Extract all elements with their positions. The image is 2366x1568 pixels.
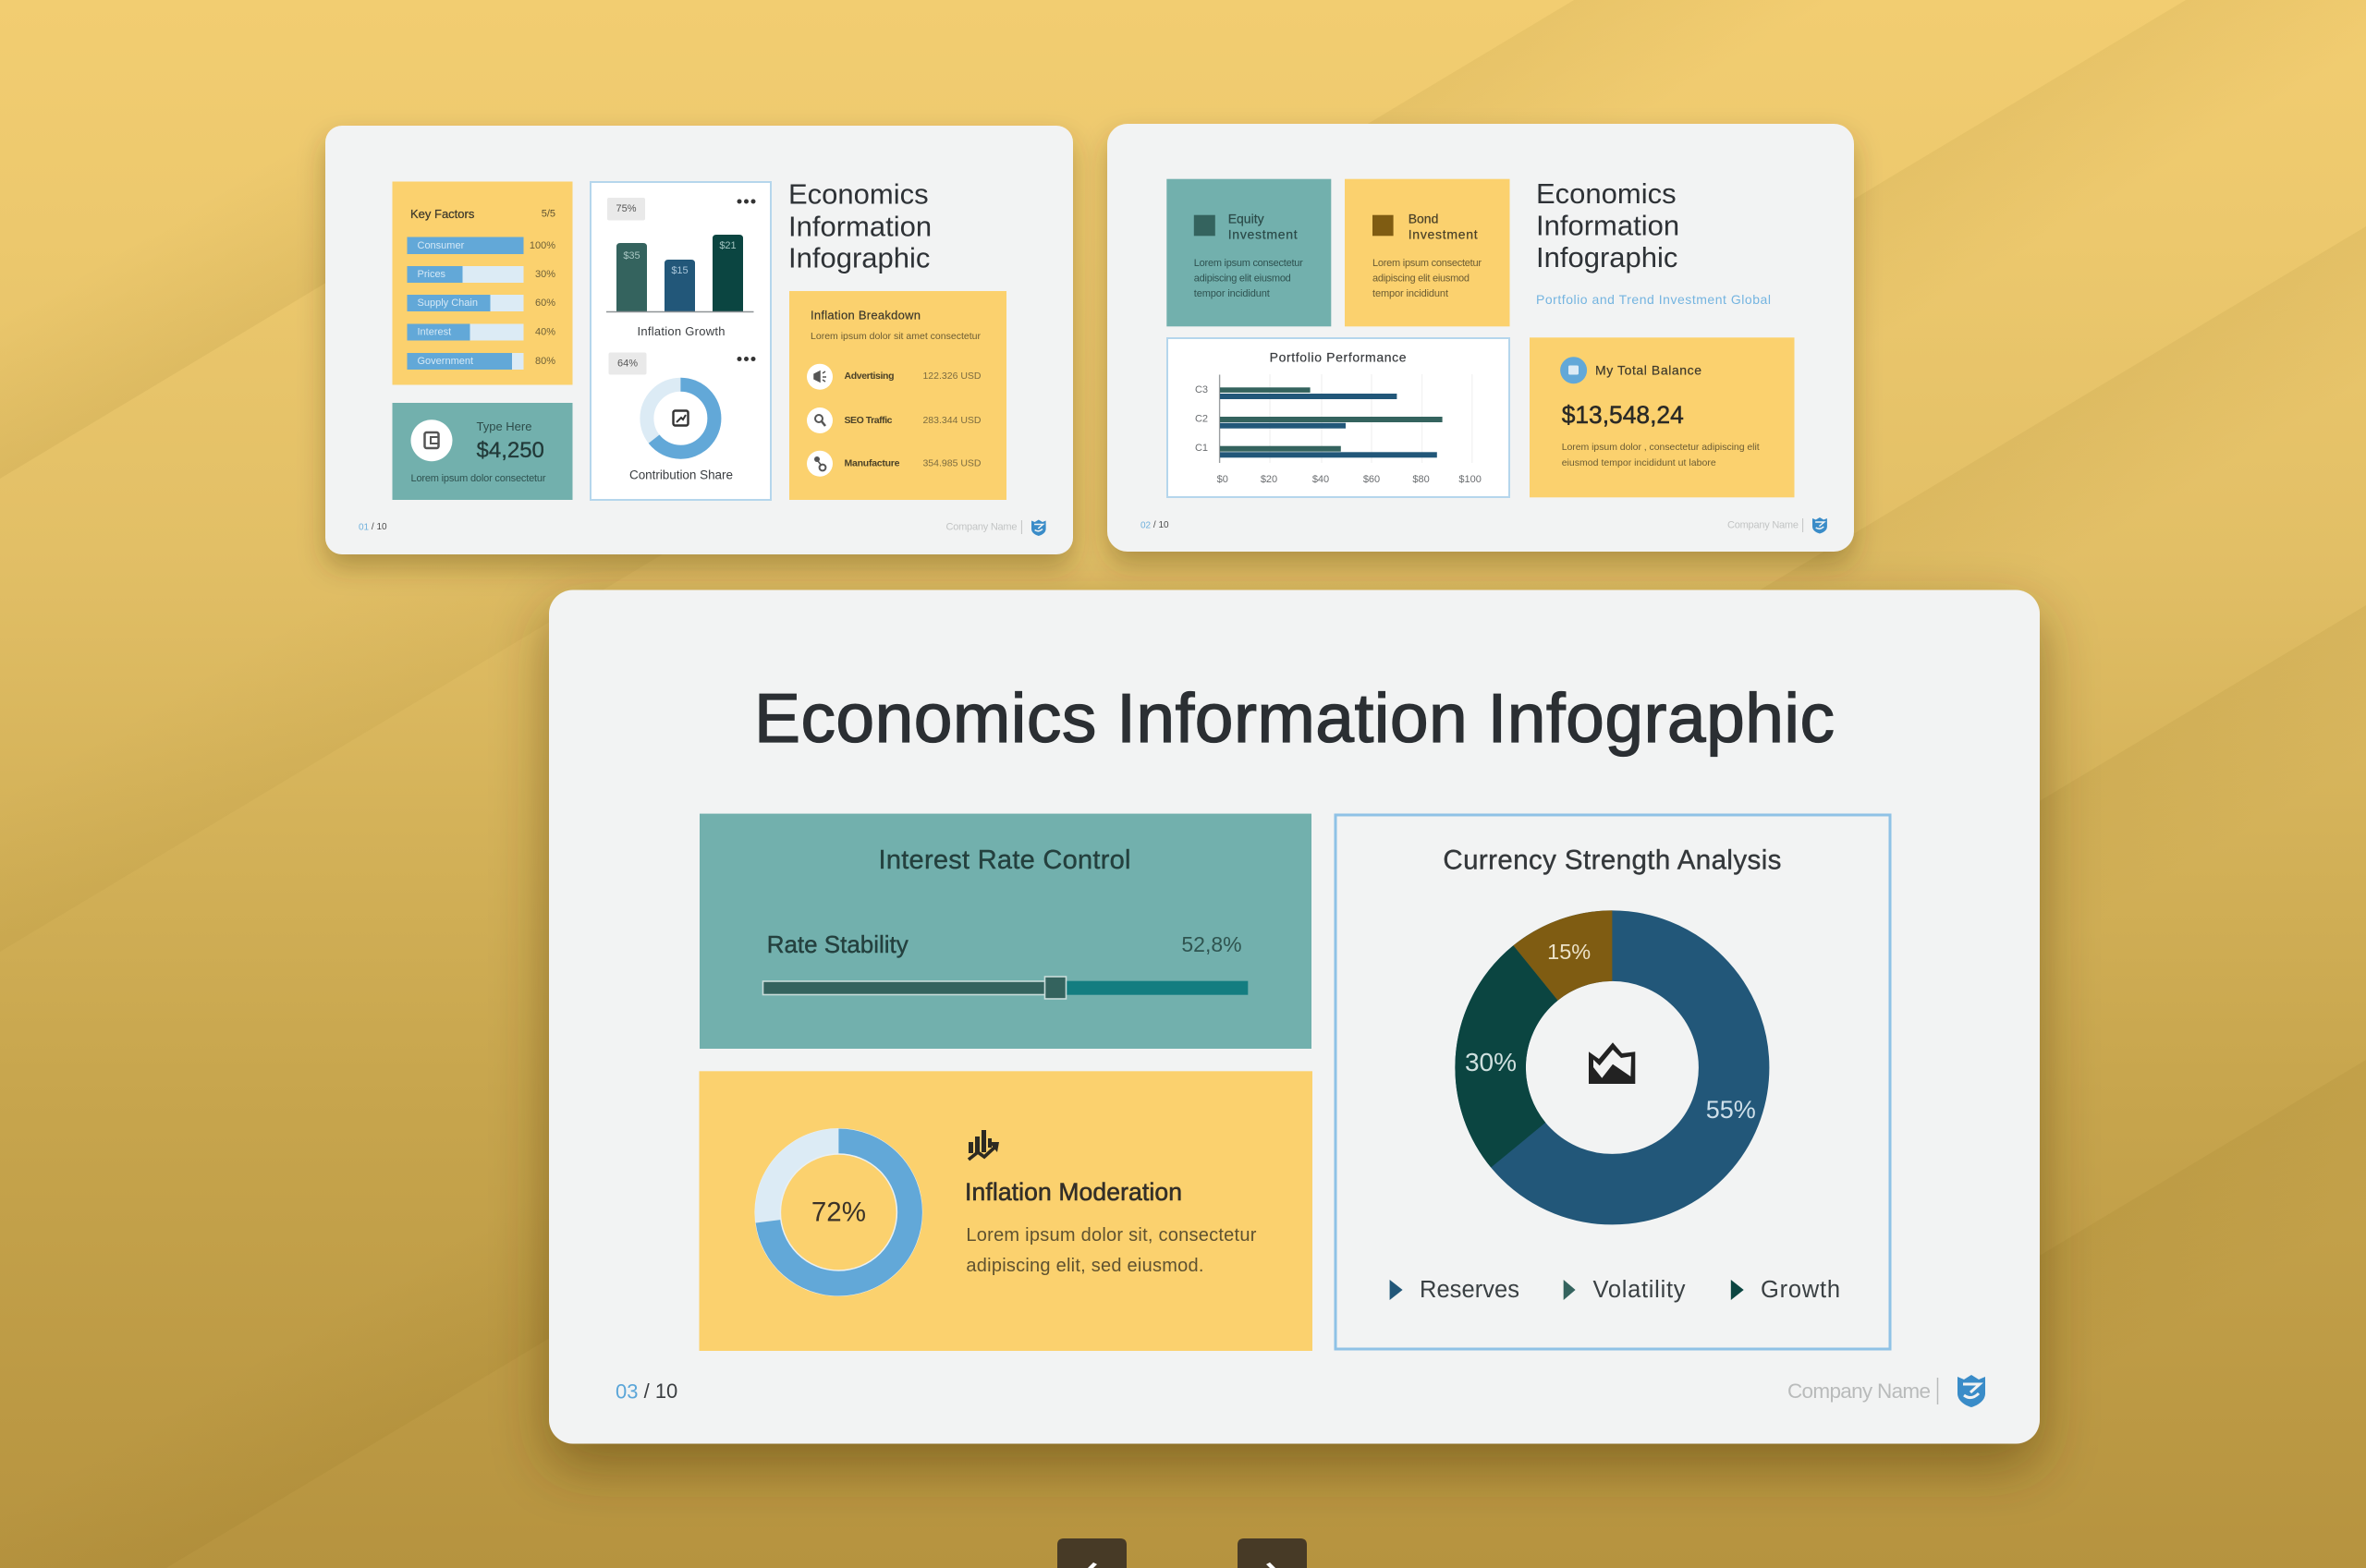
chart: portfolio performance: $0	[1217, 474, 1228, 485]
legend: Reserves	[1420, 1277, 1519, 1303]
donut chart: currency strength: 30%	[1465, 1048, 1517, 1076]
panel: type here value	[392, 403, 573, 500]
panel: bond investment: Investment	[1409, 227, 1478, 242]
panel: key factors: Consumer	[418, 240, 465, 251]
panel: key factors: 5/5	[542, 209, 555, 220]
chart: portfolio performance: C3	[1195, 384, 1208, 395]
panel: key factors: Prices	[418, 269, 446, 280]
panel: inflation breakdown: Inflation Breakdown	[811, 309, 921, 322]
panel: my total balance: Lorem ipsum dolor , consectetur adipiscing elit	[1562, 442, 1760, 453]
panel: inflation breakdown: SEO Traffic	[845, 415, 893, 426]
panel: bond investment: adipiscing elit eiusmod	[1372, 273, 1470, 285]
panel: inflation breakdown: Manufacture	[845, 458, 900, 469]
panel: inflation growth and contribution share: 75%	[616, 203, 637, 214]
panel: key factors	[392, 181, 573, 384]
panel: inflation breakdown: Advertising	[845, 371, 895, 382]
chart: portfolio performance: $20	[1261, 474, 1277, 485]
icon: bars with trend arrow	[969, 1130, 999, 1160]
panel: type here value: Type Here	[477, 419, 531, 433]
chart: portfolio performance	[1167, 338, 1509, 497]
panel: key factors: Government	[418, 356, 473, 367]
panel: key factors: 30%	[535, 269, 555, 280]
chart: portfolio performance: $100	[1458, 474, 1482, 485]
panel: interest rate control: 52,8%	[1181, 932, 1242, 956]
panel: bond investment: Lorem ipsum consectetur	[1372, 258, 1482, 269]
panel: equity investment: Investment	[1228, 227, 1298, 242]
panel: inflation moderation: adipiscing elit, sed eiusmod.	[966, 1256, 1203, 1276]
panel: inflation growth and contribution share: Contribution Share	[629, 468, 733, 482]
footer: slide 3 page number: 03 / 10	[616, 1380, 677, 1403]
legend	[1390, 1277, 1840, 1303]
panel: interest rate control	[700, 814, 1311, 1049]
slider	[763, 977, 1248, 999]
title: slide 2: Economics	[1536, 177, 1677, 210]
panel: equity investment: Lorem ipsum consectetur	[1194, 258, 1303, 269]
panel: key factors: 80%	[535, 356, 555, 367]
nav button: next	[1238, 1538, 1307, 1568]
panel: inflation moderation: Inflation Moderation	[965, 1178, 1182, 1206]
panel: inflation breakdown: 283.344 USD	[922, 415, 982, 426]
slide 2 card	[1107, 124, 1854, 552]
title: slide 2	[1536, 177, 1679, 273]
panel: my total balance: My Total Balance	[1595, 363, 1701, 378]
panel: inflation breakdown: 354.985 USD	[922, 458, 982, 469]
title: slide 2: Infographic	[1536, 241, 1677, 273]
panel: inflation moderation	[699, 1071, 1312, 1351]
donut chart: currency strength: 55%	[1706, 1096, 1756, 1124]
chart: portfolio performance: $40	[1312, 474, 1329, 485]
panel: equity investment: tempor incididunt	[1194, 288, 1270, 299]
icon: slide 1 shield logo	[1031, 519, 1046, 536]
donut chart: currency strength	[1465, 940, 1756, 1189]
panel: equity investment	[1166, 179, 1331, 326]
panel: interest rate control: Rate Stability	[767, 930, 909, 958]
donut chart: 72 percent	[754, 1128, 922, 1296]
panel: key factors: Key Factors	[410, 207, 475, 221]
panel: key factors: Supply Chain	[418, 298, 478, 309]
chart: portfolio performance: C2	[1195, 414, 1208, 425]
panel: inflation breakdown	[789, 291, 1006, 500]
chart: portfolio performance: $60	[1363, 474, 1380, 485]
chart: portfolio performance: Portfolio Performance	[1270, 350, 1407, 365]
panel: key factors: 60%	[535, 298, 555, 309]
donut chart: currency strength: 15%	[1547, 940, 1591, 964]
footer: slide 1 company name: Company Name	[946, 521, 1017, 532]
panel: type here value: $4,250	[477, 438, 544, 463]
panel: currency strength analysis	[1335, 815, 1890, 1349]
panel: inflation growth and contribution share: $35	[623, 250, 640, 261]
panel: my total balance	[1530, 337, 1795, 497]
panel: equity investment: Equity	[1228, 212, 1264, 226]
chart: portfolio performance: C1	[1195, 443, 1208, 454]
icon: slide 3 shield logo	[1957, 1375, 1985, 1407]
donut chart: 72 percent: 72%	[811, 1197, 866, 1227]
title: slide 1: Infographic	[788, 242, 930, 273]
panel: key factors: Interest	[418, 327, 451, 338]
panel: bond investment	[1345, 179, 1510, 326]
panel: key factors: 40%	[535, 327, 555, 338]
panel: inflation moderation: Lorem ipsum dolor sit, consectetur	[966, 1225, 1257, 1246]
slide 1 card	[325, 126, 1073, 554]
footer: slide 1 page number: 01 / 10	[359, 522, 387, 532]
title: slide 1: Information	[788, 211, 932, 242]
panel: type here value: Lorem ipsum dolor consectetur	[410, 473, 546, 484]
icon: mountain chart	[1589, 1042, 1635, 1084]
chart: portfolio performance: $80	[1412, 474, 1430, 485]
icon: slide 2 shield logo	[1812, 517, 1827, 534]
panel: inflation growth and contribution share: Inflation Growth	[638, 324, 725, 338]
panel: inflation growth and contribution share	[591, 182, 771, 500]
panel: interest rate control: Interest Rate Control	[878, 845, 1131, 875]
panel: bond investment: tempor incididunt	[1372, 288, 1448, 299]
title: slide 1	[788, 177, 932, 273]
panel: bond investment: Bond	[1409, 212, 1438, 226]
panel: key factors: 100%	[530, 240, 555, 251]
main title: Economics Information Infographic	[754, 679, 1835, 757]
panel: my total balance: $13,548,24	[1562, 401, 1684, 429]
panel: inflation growth and contribution share: $21	[719, 240, 737, 251]
legend: Growth	[1761, 1277, 1840, 1303]
panel: equity investment: adipiscing elit eiusmod	[1194, 273, 1291, 285]
panel: inflation breakdown: Lorem ipsum dolor sit amet consectetur	[811, 331, 982, 342]
title: slide 1: Economics	[788, 177, 929, 211]
footer: slide 2 page number: 02 / 10	[1140, 520, 1169, 530]
subtitle: portfolio and trend: Portfolio and Trend Investment Global	[1536, 292, 1771, 307]
panel: inflation growth and contribution share: $15	[671, 265, 689, 276]
panel: inflation growth and contribution share: 64%	[617, 359, 638, 370]
nav button: previous	[1057, 1538, 1127, 1568]
panel: my total balance: eiusmod tempor incididunt ut labore	[1562, 457, 1716, 468]
legend: Volatility	[1593, 1277, 1686, 1303]
panel: inflation breakdown: 122.326 USD	[922, 371, 982, 382]
panel: currency strength analysis: Currency Strength Analysis	[1443, 845, 1781, 876]
title: slide 2: Information	[1536, 209, 1679, 242]
footer: slide 2 company name: Company Name	[1727, 519, 1799, 530]
footer: slide 3 company name: Company Name	[1787, 1380, 1931, 1403]
slide 3 card	[549, 590, 2040, 1443]
